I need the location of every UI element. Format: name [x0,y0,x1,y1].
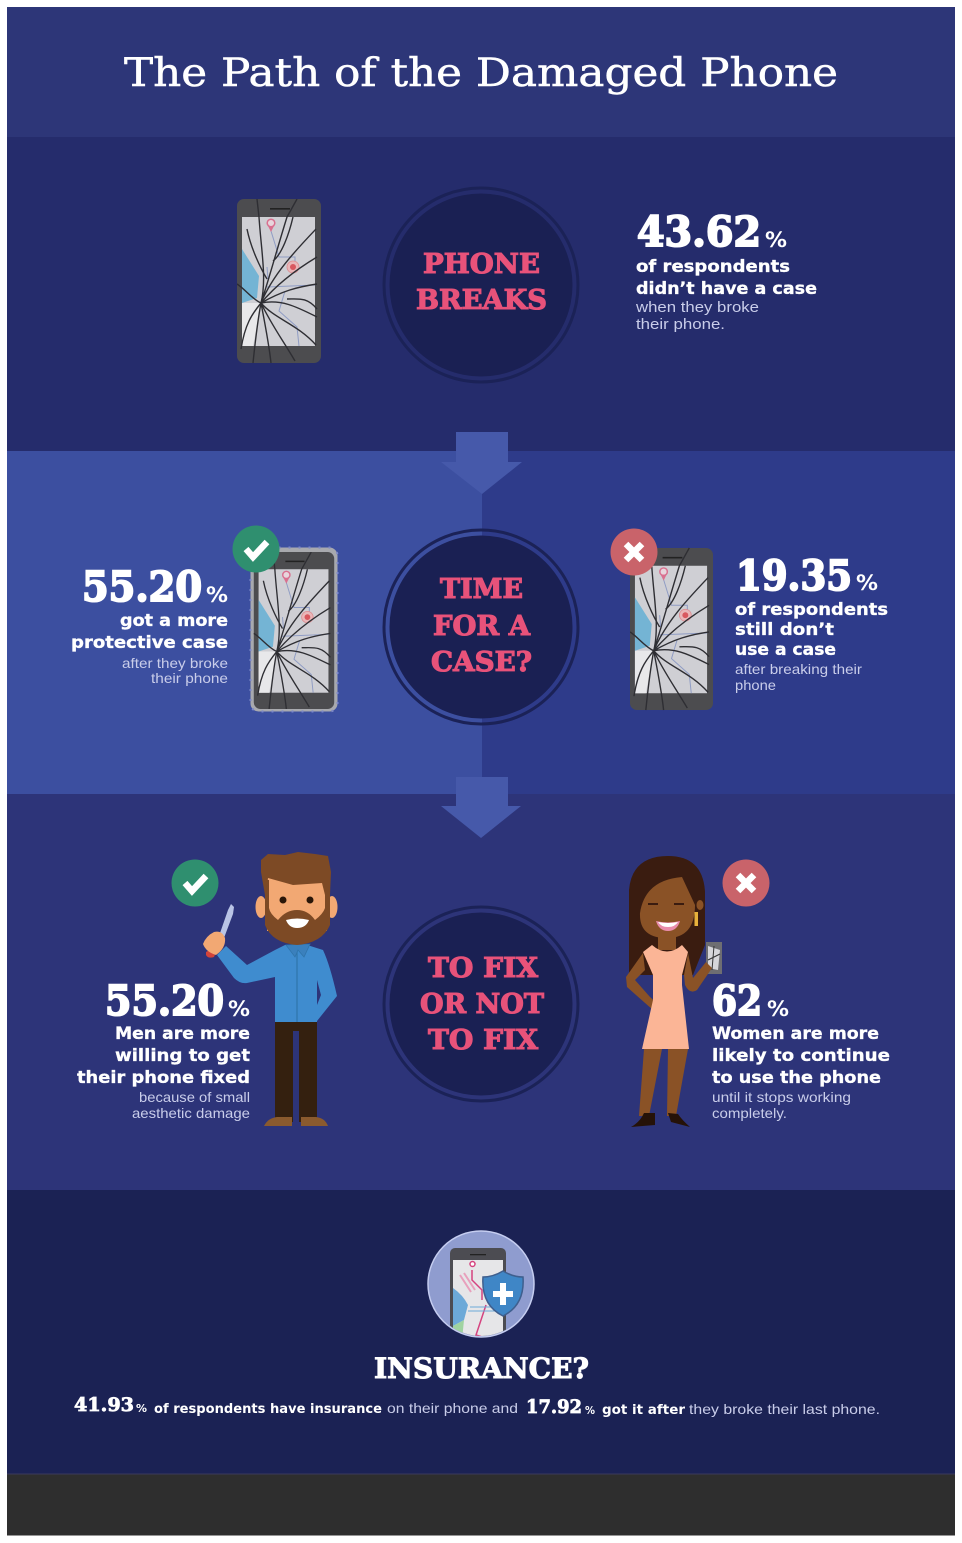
stat: women: until it stops working [712,1089,851,1105]
badge: time for a case: FOR A [433,611,531,642]
stat: men: Men are more [115,1024,250,1043]
stat: no case: didn’t have a case [636,279,817,298]
stat: no case [635,208,817,333]
panel: phone breaks [7,137,955,451]
stat: women: 62 [712,977,762,1025]
stat: protective case: % [206,583,228,607]
stat: protective case: 55.20 [82,563,202,611]
heading: insurance: INSURANCE? [374,1352,589,1385]
stat: women: likely to continue [712,1046,890,1065]
text: insurance statistics: they broke their last phone. [689,1401,880,1417]
stat: still no case: 19.35 [736,552,852,600]
icon: cross badge [610,528,658,576]
icon: cracked phone without case [630,548,713,710]
badge: time for a case [384,530,578,724]
stat: men: their phone fixed [77,1068,250,1087]
panel: header [7,7,955,137]
text: insurance statistics: got it after [602,1403,686,1418]
text: insurance statistics: on their phone and [387,1400,518,1416]
badge: time for a case: CASE? [431,647,532,678]
stat: men: because of small [139,1089,250,1105]
stat: still no case: after breaking their [735,661,862,677]
icon: check badge [172,860,218,906]
footer bar [7,1474,955,1536]
panel: time for a case [7,451,955,794]
stat: no case: of respondents [636,257,790,276]
text: insurance statistics: % [136,1402,147,1415]
text: insurance statistics: % [585,1404,595,1417]
stat: women: to use the phone [712,1068,881,1087]
stat: no case: when they broke [635,299,759,316]
stat: protective case: their phone [151,670,228,686]
stat: women: completely. [712,1105,787,1121]
stat: still no case: still don’t [735,620,834,639]
stat: still no case [735,552,888,693]
badge: to fix or not to fix [384,907,578,1101]
stat: no case: 43.62 [637,208,761,256]
stat: women [712,977,890,1121]
stat: no case: their phone. [636,316,725,333]
stat: men: 55.20 [105,977,224,1025]
arrow: to fix or not [441,777,521,838]
stat: men: % [228,997,250,1021]
icon: check badge [232,526,280,572]
text: insurance statistics: of respondents have insurance [154,1402,382,1417]
stat: men: willing to get [115,1046,250,1065]
badge: phone breaks: BREAKS [416,285,547,316]
text: insurance statistics: 41.93 [74,1394,134,1416]
stat: men: aesthetic damage [132,1105,250,1121]
stat: still no case: % [856,571,878,595]
stat: women: % [767,997,789,1021]
stat: men [77,977,250,1121]
stat: protective case: after they broke [122,655,228,671]
stat: still no case: of respondents [735,600,888,619]
icon: cracked phone [237,199,321,363]
stat: protective case [71,563,228,686]
badge: phone breaks [384,188,578,382]
badge: to fix or not to fix: TO FIX [428,953,538,984]
text: insurance statistics [74,1394,880,1418]
icon: cross badge [722,860,770,906]
stat: protective case: protective case [71,633,228,652]
stat: still no case: use a case [735,640,836,659]
text: insurance statistics: 17.92 [526,1396,582,1418]
icon: insured phone [428,1231,534,1348]
stat: still no case: phone [735,677,776,693]
illustration: woman with phone [626,856,722,1127]
icon: phone in protective case [250,548,338,712]
stat: women: Women are more [712,1024,879,1043]
badge: to fix or not to fix: OR NOT [420,989,544,1020]
badge: to fix or not to fix: TO FIX [428,1025,538,1056]
arrow: to time for a case [441,432,522,494]
panel: to fix or not to fix [7,794,955,1190]
badge: phone breaks: PHONE [423,249,540,280]
badge: time for a case: TIME [440,574,523,605]
stat: protective case: got a more [120,611,228,630]
illustration: man with screwdriver [203,852,338,1126]
panel: insurance [7,1190,955,1474]
title: The Path of the Damaged Phone [124,51,838,96]
stat: no case: % [765,228,787,252]
